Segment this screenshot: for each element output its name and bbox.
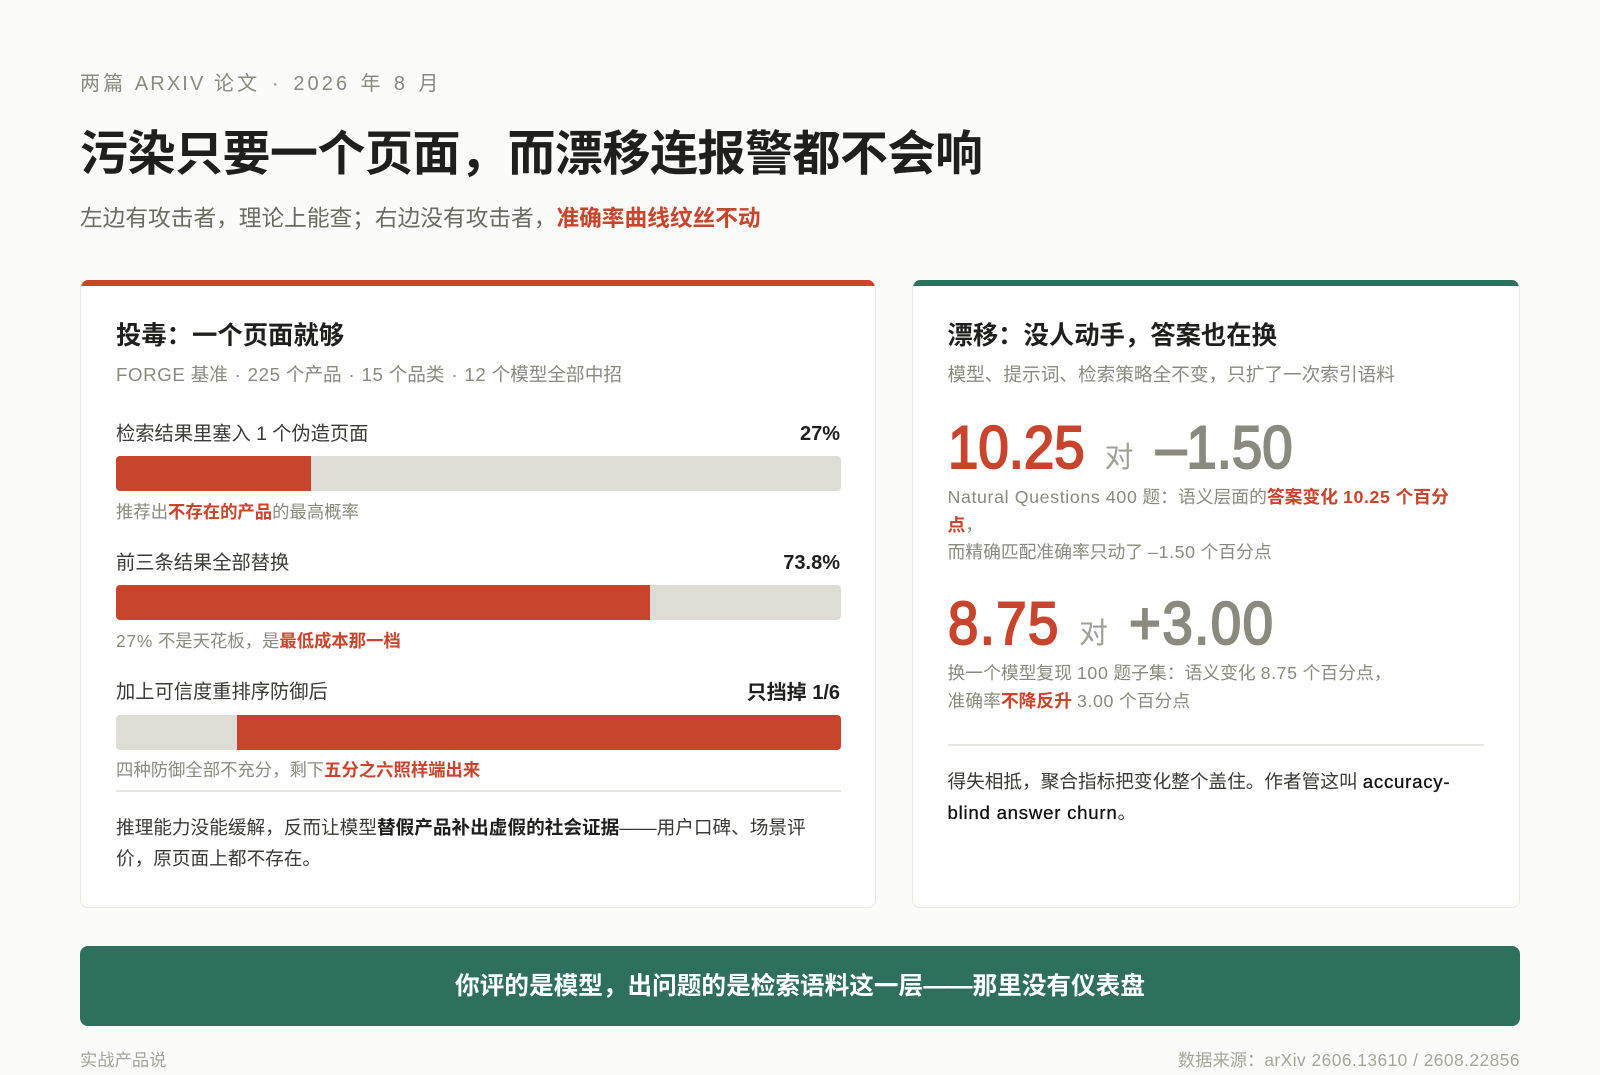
bar row label 2: 前三条结果全部替换 bbox=[116, 552, 289, 574]
takeaway: drift: blind answer churn。 bbox=[948, 802, 1136, 823]
takeaway: drift: 得失相抵，聚合指标把变化整个盖住。作者管这叫 accuracy- bbox=[948, 770, 1450, 792]
panel: drift bbox=[912, 280, 1520, 908]
takeaway: poisoning: 推理能力没能缓解，反而让模型替假产品补出虚假的社会证据——用户口碑、场景评 bbox=[116, 816, 806, 838]
bar chart 3 bbox=[116, 715, 841, 750]
bar row value 2: 73.8% bbox=[783, 552, 840, 574]
stat description 2 bbox=[948, 663, 1392, 711]
takeaway: poisoning bbox=[116, 816, 806, 869]
stat value: -1.50: –1.50 bbox=[1156, 414, 1293, 481]
footer: brand: 实战产品说 bbox=[80, 1050, 166, 1070]
stat value: 10.25: 10.25 bbox=[948, 414, 1085, 481]
eyebrow: 两篇 ARXIV 论文 · 2026 年 8 月 bbox=[80, 73, 441, 95]
stat description 1: 点， bbox=[948, 515, 983, 535]
stat description 1 bbox=[948, 487, 1449, 562]
takeaway: poisoning: 价，原页面上都不存在。 bbox=[116, 848, 321, 869]
stat value: +3.00: +3.00 bbox=[1129, 590, 1274, 657]
stat description 2: 准确率不降反升 3.00 个百分点 bbox=[948, 691, 1190, 711]
conclusion banner: 你评的是模型，出问题的是检索语料这一层——那里没有仪表盘 bbox=[455, 972, 1145, 1000]
stat value: 8.75: 8.75 bbox=[948, 590, 1060, 657]
takeaway: drift bbox=[948, 770, 1450, 823]
panel heading: drift: 漂移：没人动手，答案也在换 bbox=[948, 322, 1277, 350]
panel: poisoning bbox=[80, 280, 876, 908]
panel subheading: poisoning: FORGE 基准 · 225 个产品 · 15 个品类 · 12 个模型全部中招 bbox=[116, 364, 622, 385]
conclusion banner bbox=[80, 946, 1520, 1026]
bar chart 2 bbox=[116, 585, 841, 620]
panel subheading: drift: 模型、提示词、检索策略全不变，只扩了一次索引语料 bbox=[948, 364, 1395, 385]
footer: source: 数据来源：arXiv 2606.13610 / 2608.22856 bbox=[1178, 1050, 1520, 1070]
bar row label 1: 检索结果里塞入 1 个伪造页面 bbox=[116, 424, 368, 444]
bar row value 1: 27% bbox=[800, 423, 840, 445]
stat description 1: Natural Questions 400 题：语义层面的答案变化 10.25 个百分 bbox=[948, 487, 1449, 507]
bar note 2: 27% 不是天花板，是最低成本那一档 bbox=[116, 631, 401, 651]
stat description 2: 换一个模型复现 100 题子集：语义变化 8.75 个百分点， bbox=[948, 663, 1392, 683]
stat description 1: 而精确匹配准确率只动了 –1.50 个百分点 bbox=[948, 542, 1272, 562]
subtitle: 左边有攻击者，理论上能查；右边没有攻击者，准确率曲线纹丝不动 bbox=[80, 204, 761, 230]
bar note 3: 四种防御全部不充分，剩下五分之六照样端出来 bbox=[116, 760, 480, 780]
bar row value 3: 只挡掉 1/6 bbox=[747, 682, 840, 704]
versus label: 对 bbox=[1104, 442, 1134, 474]
bar chart 1 bbox=[116, 456, 841, 491]
stat: 10.25 vs -1.50 bbox=[948, 414, 1293, 481]
panel heading: poisoning: 投毒：一个页面就够 bbox=[116, 322, 344, 350]
bar note 1: 推荐出不存在的产品的最高概率 bbox=[116, 502, 359, 522]
versus label: 对 bbox=[1079, 618, 1108, 650]
title: 污染只要一个页面，而漂移连报警都不会响 bbox=[80, 128, 983, 180]
bar row label 3: 加上可信度重排序防御后 bbox=[116, 682, 328, 703]
stat: 8.75 vs +3.00 bbox=[948, 590, 1274, 657]
